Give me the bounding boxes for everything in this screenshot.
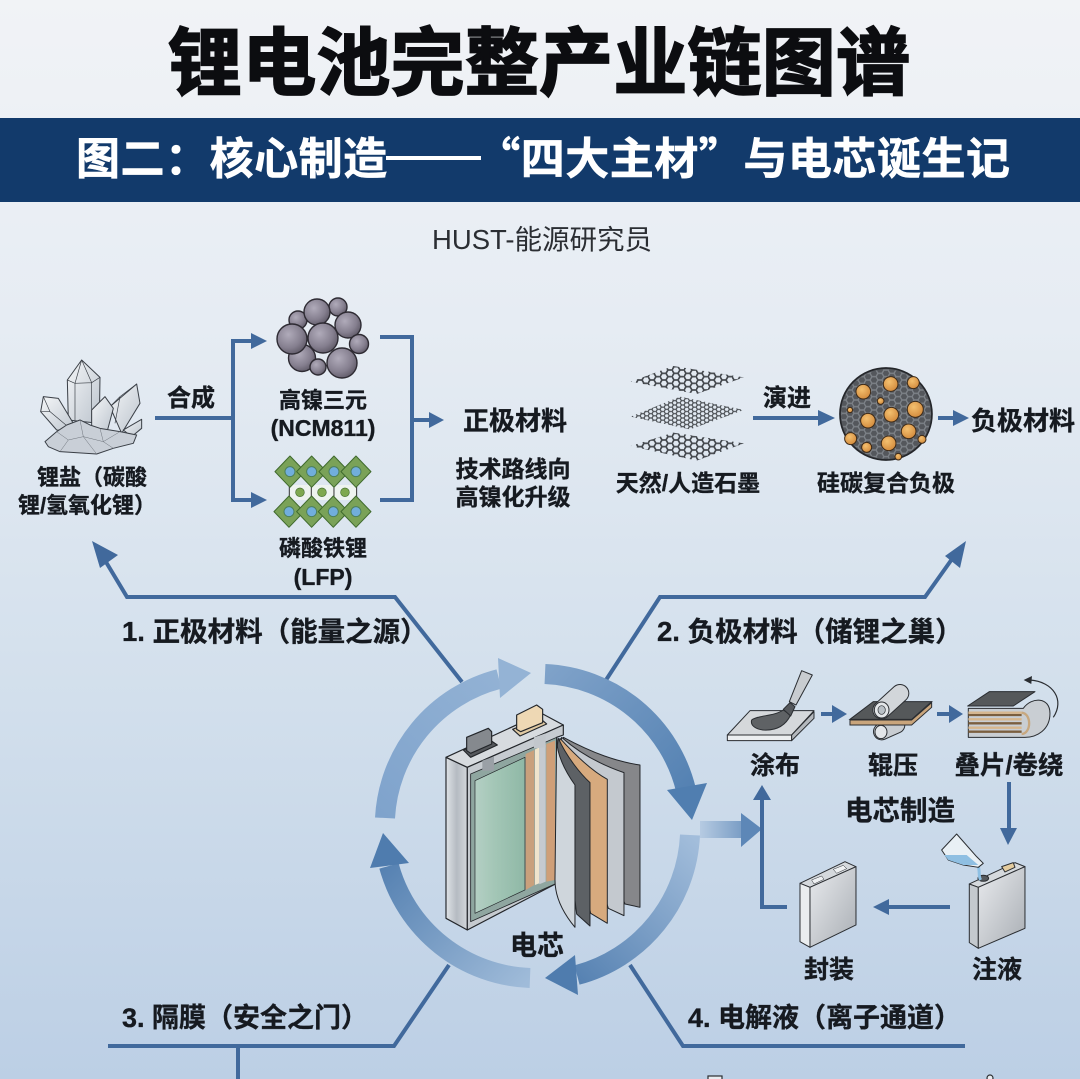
tab: positive terminal bbox=[513, 705, 547, 748]
connector: 3 separator bbox=[108, 965, 449, 1079]
labels: process steps: 辊压 bbox=[868, 752, 918, 780]
ring: cycle arrows bbox=[370, 658, 707, 995]
connector: 4 electrolyte bbox=[630, 965, 965, 1046]
label: NCM811 bbox=[271, 388, 375, 441]
icon tips cut off at edge bbox=[708, 1075, 993, 1079]
label: NCM811: 高镍三元 bbox=[279, 388, 367, 413]
labels: process steps: 涂布 bbox=[750, 751, 800, 780]
icon: sealed cell bbox=[800, 862, 856, 947]
icon: LFP crystal lattice bbox=[274, 456, 371, 527]
arrow: sealing back to coating bbox=[753, 785, 787, 907]
arrow: evolution bbox=[753, 410, 835, 426]
labels: process steps: 电芯制造 bbox=[845, 795, 955, 826]
label: cathode materials: 正极材料 bbox=[463, 406, 567, 436]
icon: silicon carbon composite bbox=[840, 368, 932, 460]
icon: graphite layers bbox=[631, 366, 744, 461]
heading: 4 electrolyte: 4. 电解液（离子通道） bbox=[688, 1003, 961, 1033]
connector: 2 anode bbox=[606, 541, 966, 680]
note: technology route: 技术路线向 bbox=[456, 456, 570, 482]
icon: battery cell cutaway bbox=[446, 705, 640, 930]
title: 锂电池完整产业链图谱 bbox=[168, 4, 910, 111]
arrow: rolling to stacking bbox=[937, 705, 963, 723]
tab: negative terminal bbox=[463, 728, 497, 771]
connector: 1 cathode bbox=[92, 541, 462, 682]
label: lithium salt: 锂/氢氧化锂） bbox=[18, 493, 156, 518]
label: LFP bbox=[279, 536, 367, 590]
subtitle banner bbox=[0, 118, 1080, 202]
label: LFP: (LFP) bbox=[294, 564, 352, 590]
heading: 3 separator: 3. 隔膜（安全之门） bbox=[122, 1003, 368, 1033]
arrow: coating to rolling bbox=[821, 705, 847, 723]
labels: process steps bbox=[750, 751, 1064, 984]
author credit: HUST-能源研究员 bbox=[432, 224, 652, 255]
label: LFP: 磷酸铁锂 bbox=[279, 536, 367, 561]
icon: coating bbox=[727, 671, 814, 741]
arrow: filling to sealing bbox=[873, 899, 950, 915]
labels: process steps: 封装 bbox=[804, 956, 854, 984]
label: anode materials: 负极材料 bbox=[971, 406, 1075, 436]
heading: 2 anode materials: 2. 负极材料（储锂之巢） bbox=[657, 616, 963, 647]
label: lithium salt bbox=[18, 465, 156, 518]
label: silicon carbon anode: 硅碳复合负极 bbox=[817, 470, 955, 496]
icon: electrolyte filling bbox=[942, 834, 1025, 948]
icon: NCM811 particles bbox=[277, 298, 368, 378]
arrow: cell into manufacturing bbox=[700, 813, 762, 847]
labels: process steps: 叠片/卷绕 bbox=[954, 752, 1064, 780]
panel: anode materials bbox=[616, 366, 1075, 496]
label: battery cell: 电芯 bbox=[510, 931, 564, 961]
label: NCM811: (NCM811) bbox=[271, 415, 375, 441]
icon: lithium salt crystal bbox=[41, 360, 142, 454]
note: technology route bbox=[456, 456, 570, 510]
panel: cell manufacturing bbox=[700, 671, 1064, 984]
pages: electrode layers bbox=[555, 737, 640, 927]
arrows: synthesis split bbox=[155, 333, 267, 508]
note: technology route: 高镍化升级 bbox=[456, 484, 570, 510]
labels: process steps: 注液 bbox=[972, 956, 1022, 984]
heading: 1 cathode materials: 1. 正极材料（能量之源） bbox=[122, 616, 428, 647]
subtitle text: 图二：核心制造——“四大主材”与电芯诞生记 bbox=[76, 123, 1010, 187]
label: evolution: 演进 bbox=[763, 385, 811, 412]
arrow: to anode bbox=[938, 410, 969, 426]
icon: rolling bbox=[850, 693, 932, 739]
arrow: stacking to filling bbox=[1000, 782, 1017, 845]
icon: stacking and winding bbox=[968, 676, 1058, 737]
arrows: merge to cathode bbox=[380, 337, 444, 500]
label: synthesis: 合成 bbox=[167, 385, 215, 412]
panel: cathode materials bbox=[18, 298, 570, 590]
label: graphite: 天然/人造石墨 bbox=[616, 470, 760, 496]
label: lithium salt: 锂盐（碳酸 bbox=[37, 465, 147, 490]
